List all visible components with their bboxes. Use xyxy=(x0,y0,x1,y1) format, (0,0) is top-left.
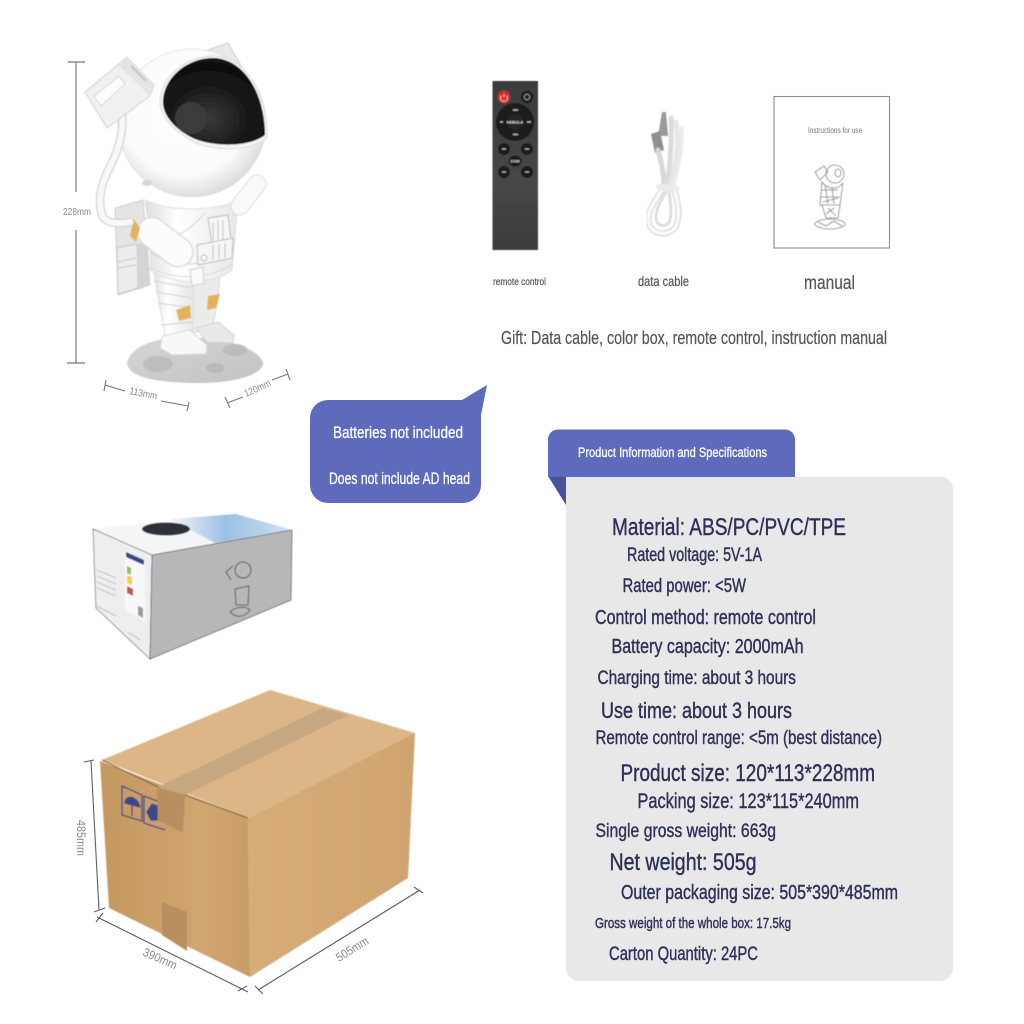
coil strands xyxy=(648,118,682,233)
callout: not included xyxy=(310,385,487,503)
product figure: astronaut projector with dimensions xyxy=(63,43,290,411)
box left face xyxy=(93,529,152,659)
panel: product information and specifications xyxy=(548,430,953,981)
air tube xyxy=(100,110,130,223)
remote control xyxy=(492,81,538,250)
spec: packing size: Packing size: 123*115*240mm xyxy=(638,790,859,813)
header ribbon xyxy=(548,430,795,477)
arm left xyxy=(152,232,178,252)
torso xyxy=(145,200,238,286)
helmet xyxy=(118,49,266,197)
label: manual: manual xyxy=(804,273,855,294)
left face fine print xyxy=(97,570,140,640)
icon: astronaut sketch xyxy=(815,165,845,229)
carton dimensions xyxy=(74,760,423,994)
spec: outer packaging size: Outer packaging size: 505*390*485mm xyxy=(621,882,898,904)
remote body xyxy=(492,81,538,250)
data cable xyxy=(648,112,682,233)
spec: rated power: Rated power: <5W xyxy=(622,576,746,597)
dimension: 390mm: 390mm xyxy=(141,945,179,972)
manual xyxy=(774,96,890,248)
spec: use time: Use time: about 3 hours xyxy=(601,698,792,723)
lens print xyxy=(142,522,190,536)
carton left face xyxy=(100,761,250,977)
spec list xyxy=(595,514,898,965)
antenna right xyxy=(208,43,248,80)
star label: STAR xyxy=(510,160,520,164)
moon base xyxy=(127,337,263,383)
usb plugs xyxy=(651,112,668,153)
dimension: 505mm xyxy=(255,887,423,994)
spec: net weight: Net weight: 505g xyxy=(610,849,756,876)
dimension: height 228mm: 228mm xyxy=(63,207,91,218)
dimension: 505mm: 505mm xyxy=(333,934,371,965)
spec: product size: Product size: 120*113*228mm xyxy=(620,760,875,787)
spec: material: Material: ABS/PC/PVC/TPE xyxy=(612,514,846,541)
shoes xyxy=(160,322,234,355)
icon: astronaut lamp xyxy=(85,43,267,383)
button marks xyxy=(502,149,529,172)
spec: gross weight whole box: Gross weight of the whole box: 17.5kg xyxy=(595,916,791,932)
life support pack xyxy=(115,200,150,295)
gift line: Gift: Data cable, color box, remote control, instruction manual xyxy=(501,328,887,348)
box top xyxy=(93,514,292,555)
sky print xyxy=(170,514,292,543)
astronaut outline print xyxy=(226,562,251,616)
carton top xyxy=(102,690,415,818)
collar behind helmet xyxy=(150,50,215,90)
spec: single gross weight: Single gross weight: 663g xyxy=(596,820,776,842)
power button xyxy=(498,91,510,103)
box right face xyxy=(150,530,292,659)
nebula label: NEBULA xyxy=(507,120,523,124)
energy label xyxy=(125,552,145,622)
label: data cable: data cable xyxy=(638,273,689,289)
dimension: 390mm xyxy=(96,913,248,992)
arm raised shadow xyxy=(240,184,257,206)
spec: rated voltage: Rated voltage: 5V-1A xyxy=(627,545,762,566)
label: remote control: remote control xyxy=(493,276,546,288)
navigation pad xyxy=(496,103,534,141)
small buttons xyxy=(498,143,533,178)
gold patches xyxy=(130,219,220,321)
spec: control method: Control method: remote control xyxy=(595,607,816,629)
timer button xyxy=(521,91,533,103)
tape on top xyxy=(158,708,348,795)
icon: fragile handling xyxy=(144,796,165,830)
chin detail xyxy=(142,180,152,186)
legs xyxy=(153,262,221,336)
spec: battery capacity: Battery capacity: 2000mAh xyxy=(612,636,804,658)
header ribbon fold xyxy=(548,476,566,505)
speech bubble xyxy=(310,385,487,503)
spec: carton quantity: Carton Quantity: 24PC xyxy=(609,943,758,965)
spec: remote control range: Remote control range: <5m (best distance) xyxy=(596,728,882,749)
dimension: 485mm: 485mm xyxy=(74,820,88,856)
spec: charging time: Charging time: about 3 hours xyxy=(598,668,796,689)
tape flap front xyxy=(157,787,185,833)
tape bottom xyxy=(162,902,187,951)
air tube highlight xyxy=(100,110,130,223)
item labels xyxy=(493,273,887,348)
carton right face xyxy=(248,733,415,977)
icon: keep dry xyxy=(122,786,142,821)
adapter note: Does not include AD head xyxy=(329,470,470,488)
arm left shadow xyxy=(152,232,178,252)
visor xyxy=(160,56,267,149)
shoulder backpack unit xyxy=(85,57,154,128)
spec card xyxy=(566,477,953,981)
arm raised xyxy=(240,184,257,206)
flap creases xyxy=(102,760,248,818)
manual page xyxy=(774,96,890,248)
dimension: width 120mm: 120mm xyxy=(243,378,273,400)
dimension: width 120mm xyxy=(225,369,290,408)
dimension: depth 113mm: 113mm xyxy=(128,386,158,402)
header text: Product Information and Specifications xyxy=(578,445,767,460)
dimension: depth 113mm xyxy=(104,380,189,411)
manual title: Instructions for use xyxy=(808,126,862,135)
shipping carton xyxy=(100,690,415,977)
dimension: 485mm xyxy=(74,760,105,912)
batteries note: Batteries not included xyxy=(333,423,463,442)
color box xyxy=(93,514,292,659)
dimension: height 228mm xyxy=(63,62,91,363)
